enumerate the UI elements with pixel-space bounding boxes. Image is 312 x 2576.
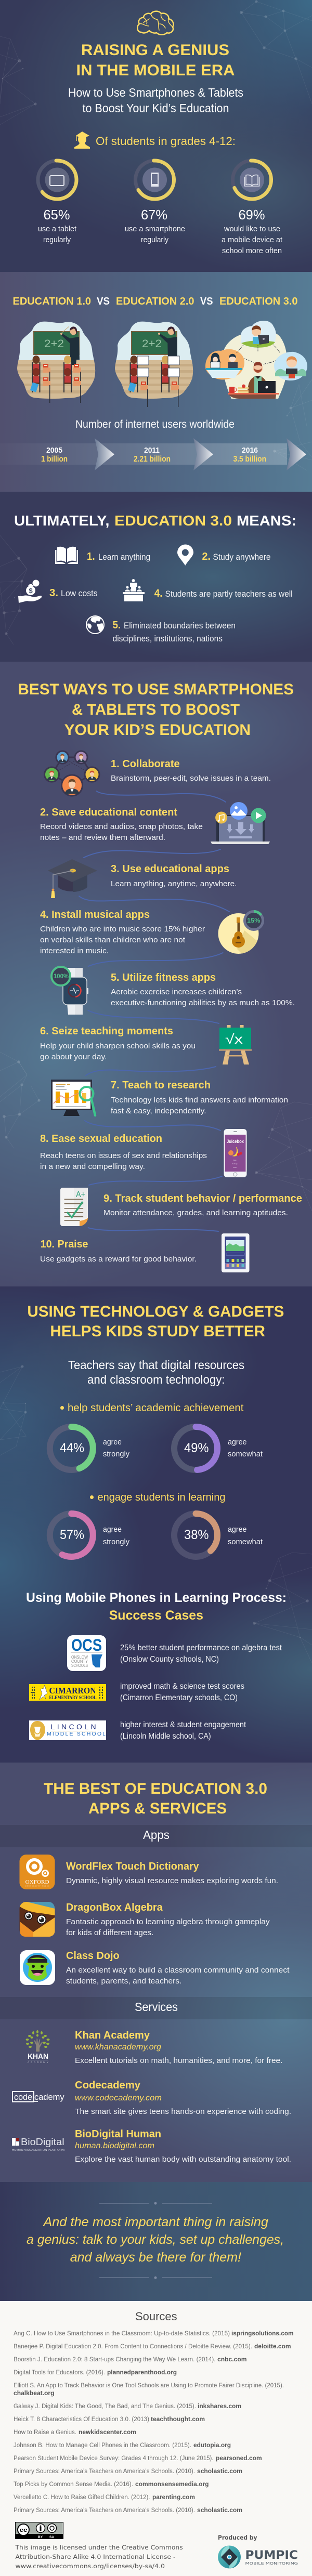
service: khan academy: Khan Academy bbox=[75, 2030, 150, 2041]
app: dragonbox: Fantastic approach to learning algebra through gameplay bbox=[66, 1917, 270, 1926]
sources list: teachthought.com bbox=[151, 2416, 205, 2423]
logo: biodigital: HUMAN VISUALIZATION PLATFORM bbox=[12, 2149, 64, 2152]
icon: phone with juicebox app: Settings bbox=[232, 1163, 238, 1165]
list item 2: study anywhere bbox=[202, 551, 270, 562]
heading: number of internet users: Number of internet users worldwide bbox=[75, 418, 235, 430]
icon: podium bbox=[123, 579, 145, 601]
icon: graduate bbox=[74, 132, 90, 149]
app: wordflex: WordFlex Touch Dictionary bbox=[66, 1861, 200, 1872]
sources list: scholastic.com bbox=[197, 2468, 242, 2475]
connector curves bbox=[79, 791, 229, 1231]
logo: onslow county schools: SCHOOLS bbox=[71, 1663, 88, 1668]
heading: education versions bbox=[12, 295, 297, 307]
heading: education versions: VS bbox=[200, 295, 213, 307]
list item 4: students are teachers: Students are partly teachers as well bbox=[165, 589, 293, 599]
app: class dojo: Class Dojo bbox=[66, 1950, 120, 1962]
sources list: scholastic.com bbox=[197, 2507, 242, 2514]
stat: tablet 65% bbox=[37, 160, 77, 244]
icon: tablet bbox=[222, 1233, 250, 1272]
item 9: track student behavior bbox=[103, 1193, 302, 1217]
donut: 38% agree somewhat: 38% bbox=[184, 1528, 209, 1542]
item 2: save educational content: Record videos and audios, snap photos, take bbox=[40, 822, 203, 831]
app: class dojo: An excellent way to build a classroom community and connect bbox=[66, 1966, 290, 1975]
icon: hand with coins: $ bbox=[29, 587, 33, 595]
icon: phone with juicebox app: Juicebox bbox=[227, 1139, 244, 1144]
bullet heading: engage students: engage students in learning bbox=[98, 1492, 226, 1503]
sources list: inkshares.com bbox=[198, 2403, 241, 2410]
timeline: internet users bbox=[0, 438, 306, 470]
icon: chalkboard bbox=[219, 1025, 252, 1064]
service: biodigital human: Explore the vast human body with outstanding anatomy tool. bbox=[75, 2155, 291, 2164]
badge: creative commons by-sa bbox=[15, 2522, 63, 2539]
item 10: praise: Use gadgets as a reward for good behavior. bbox=[40, 1255, 197, 1264]
sources list: ispringsolutions.com bbox=[231, 2331, 293, 2337]
heading: best ways: YOUR KID’S EDUCATION bbox=[64, 721, 251, 739]
item 2: save educational content: notes – and review them afterward. bbox=[40, 833, 165, 842]
app: wordflex: Dynamic, highly visual resource makes exploring words fun. bbox=[66, 1876, 278, 1885]
heading: using technology: USING TECHNOLOGY & GADGETS bbox=[27, 1303, 284, 1320]
logo: onslow county schools: OCS bbox=[71, 1636, 102, 1654]
donut: 38% agree somewhat: agree bbox=[228, 1525, 246, 1534]
logo: pumpic bbox=[218, 2546, 298, 2569]
subtitle: to Boost Your Kid’s Education bbox=[82, 101, 229, 115]
item 7: teach to research: 7. Teach to research bbox=[111, 1080, 211, 1091]
list item 3: low costs: Low costs bbox=[61, 588, 98, 598]
stat: smartphone 67%: 67% bbox=[141, 207, 167, 222]
section background: best ways bbox=[0, 662, 312, 1289]
logo: khan academy bbox=[26, 2030, 50, 2064]
title: RAISING A GENIUS bbox=[81, 42, 229, 59]
heading: best of education 3.0: THE BEST OF EDUCATION 3.0 bbox=[44, 1780, 267, 1797]
item 6: seize teaching moments: go about your day. bbox=[40, 1053, 107, 1061]
item 8: ease sexual education bbox=[40, 1133, 207, 1171]
icon: chalkboard: √x bbox=[225, 1031, 243, 1047]
list item 3: low costs bbox=[49, 587, 98, 599]
quote top divider bbox=[99, 2202, 212, 2205]
heading: best ways: & TABLETS TO BOOST bbox=[72, 701, 240, 718]
item 5: fitness apps bbox=[111, 972, 295, 1007]
sources list: parenting.com bbox=[152, 2494, 195, 2501]
list item 1: learn anything: 1. bbox=[87, 551, 95, 562]
donut: 57% agree strongly bbox=[50, 1514, 129, 1557]
donut: 57% agree strongly: agree bbox=[103, 1525, 122, 1534]
app icon: wordflex: UNIVERSITY PRESS bbox=[25, 1885, 49, 1887]
illustration: education 1.0 classroom: 2+2 bbox=[44, 338, 64, 350]
icon: graded document: A+ bbox=[76, 1190, 85, 1199]
service: codecademy: www.codecademy.com bbox=[75, 2094, 162, 2102]
icon: graduation cap bbox=[48, 859, 97, 898]
heading: best ways: BEST WAYS TO USE SMARTPHONES bbox=[18, 681, 294, 698]
timeline: internet users: 2011 bbox=[144, 446, 160, 455]
logo: onslow county schools bbox=[67, 1635, 106, 1671]
app: dragonbox bbox=[66, 1902, 270, 1937]
title: IN THE MOBILE ERA bbox=[76, 62, 235, 79]
app: dragonbox: DragonBox Algebra bbox=[66, 1902, 163, 1913]
section background: apps and services bbox=[0, 1763, 312, 2183]
icon: collaboration network bbox=[45, 751, 99, 796]
item 1: collaborate bbox=[111, 758, 271, 783]
sources list: newkidscenter.com bbox=[79, 2429, 136, 2436]
heading: education versions: EDUCATION 2.0 bbox=[116, 295, 194, 307]
heading: success cases: Success Cases bbox=[109, 1608, 203, 1623]
license text: This image is licensed under the Creative Commons bbox=[15, 2544, 183, 2551]
intro text: teachers say: and classroom technology: bbox=[87, 1373, 225, 1386]
title bbox=[76, 42, 235, 79]
sources list: Heick T. 8 Characteristics Of Education 3.0. (2013) bbox=[14, 2416, 149, 2423]
item 10: praise bbox=[40, 1239, 197, 1264]
timeline: internet users: 2005 bbox=[46, 446, 62, 455]
sources list: How to Raise a Genius. bbox=[14, 2429, 76, 2436]
illustration: education 3.0 connected learning bbox=[205, 321, 307, 399]
service: biodigital human bbox=[75, 2128, 291, 2164]
logo: biodigital: BioDigital bbox=[21, 2137, 64, 2147]
item 6: seize teaching moments bbox=[40, 1026, 196, 1061]
donut: 49% agree somewhat: somewhat bbox=[228, 1450, 263, 1458]
badge: creative commons by-sa: SA bbox=[49, 2535, 54, 2539]
donut: 38% agree somewhat: somewhat bbox=[228, 1537, 263, 1546]
heading: best of education 3.0 bbox=[44, 1780, 267, 1817]
case: onslow: (Onslow County schools, NC) bbox=[120, 1655, 219, 1664]
app icon: class dojo bbox=[20, 1950, 55, 1985]
service: codecademy bbox=[75, 2080, 291, 2116]
icon: phone with juicebox app bbox=[224, 1129, 246, 1177]
app icon: wordflex: OXFORD bbox=[25, 1880, 49, 1885]
illustration: education 1.0 classroom bbox=[16, 320, 97, 403]
stat: mobile at school 69%: 69% bbox=[238, 207, 265, 222]
app: dragonbox: for kids of different ages. bbox=[66, 1928, 153, 1937]
case: lincoln: higher interest & student engagement bbox=[120, 1720, 246, 1729]
section background: education 3.0 means bbox=[0, 492, 312, 662]
item 7: teach to research: fast & easy, independently. bbox=[111, 1107, 206, 1115]
stat: mobile at school 69%: would like to use bbox=[224, 225, 280, 233]
service: codecademy: The smart site gives teens hands-on experience with coding. bbox=[75, 2107, 291, 2116]
item 4: install musical apps bbox=[40, 909, 205, 955]
heading: ultimately education 3.0 means: EDUCATION 3.0 bbox=[114, 512, 232, 529]
closing quote: a genius: talk to your kids, set up challenges, bbox=[27, 2232, 284, 2247]
heading: ultimately education 3.0 means: MEANS: bbox=[237, 512, 296, 529]
timeline: internet users: 2.21 billion bbox=[134, 455, 171, 464]
list item 5: eliminated boundaries: 5. bbox=[113, 620, 121, 631]
sources list: Primary Sources: America’s Teachers on America’s Schools. (2010). bbox=[14, 2468, 195, 2475]
closing quote: And the most important thing in raising bbox=[42, 2215, 268, 2229]
item 4: install musical apps: interested in music. bbox=[40, 947, 109, 955]
item 5: fitness apps: 5. Utilize fitness apps bbox=[111, 972, 216, 983]
stat: mobile at school 69%: a mobile device at bbox=[222, 235, 283, 244]
sources list: Elliott S. An App to Track Behavior is One Tool Schools are Using to Promote Fairer Discipline. (2015). bbox=[14, 2383, 284, 2389]
logo: khan academy: ACADEMY bbox=[28, 2061, 48, 2064]
sources list: Galway J. Digital Kids: The Good, The Bad, and The Genius. (2015). bbox=[14, 2403, 196, 2410]
donut: 49% agree somewhat bbox=[174, 1427, 263, 1470]
donut: 44% agree strongly bbox=[50, 1427, 129, 1470]
heading: best ways bbox=[18, 681, 294, 739]
logo: khan academy: KHAN bbox=[28, 2052, 48, 2061]
license text bbox=[15, 2544, 183, 2570]
sources list: Johnson B. How to Manage Cell Phones in the Classroom. (2015). bbox=[14, 2442, 191, 2449]
icon: brain bbox=[137, 11, 174, 35]
heading: using technology bbox=[27, 1303, 284, 1340]
sources list: pearsoned.com bbox=[216, 2455, 262, 2462]
icon: phone with juicebox app: More bbox=[233, 1166, 237, 1168]
network decoration bbox=[0, 0, 312, 1663]
item 8: ease sexual education: in a new and compelling way. bbox=[40, 1162, 145, 1171]
timeline: internet users: 3.5 billion bbox=[233, 455, 266, 464]
intro text: teachers say: Teachers say that digital resources bbox=[68, 1358, 244, 1372]
app icon: wordflex bbox=[20, 1855, 55, 1889]
quote bottom divider bbox=[99, 2277, 212, 2279]
logo: codecademy: code bbox=[14, 2092, 32, 2102]
stat: smartphone 67% bbox=[125, 160, 185, 244]
badge: creative commons by-sa: cc bbox=[20, 2527, 27, 2533]
heading: success cases bbox=[26, 1591, 287, 1623]
logo: cimarron elementary bbox=[29, 1684, 106, 1701]
heading: best of education 3.0: APPS & SERVICES bbox=[88, 1800, 227, 1817]
item 2: save educational content: 2. Save educational content bbox=[40, 807, 177, 818]
case: lincoln bbox=[120, 1720, 246, 1741]
logo: lincoln middle school: MIDDLE SCHOOL bbox=[47, 1731, 106, 1737]
service: biodigital human: BioDigital Human bbox=[75, 2128, 161, 2140]
logo: biodigital bbox=[12, 2137, 64, 2152]
sources list: plannedparenthood.org bbox=[107, 2370, 177, 2376]
heading: education versions: EDUCATION 3.0 bbox=[219, 295, 297, 307]
item 9: track student behavior: Monitor attendance, grades, and learning aptitudes. bbox=[103, 1208, 288, 1217]
sources list: chalkbeat.org bbox=[14, 2390, 54, 2397]
subtitle: How to Use Smartphones & Tablets bbox=[68, 86, 243, 99]
item 9: track student behavior: 9. Track student behavior / performance bbox=[103, 1193, 302, 1204]
item 3: use educational apps: 3. Use educational apps bbox=[111, 863, 229, 875]
icon: location pin bbox=[177, 545, 193, 566]
item 2: save educational content bbox=[40, 807, 203, 842]
service: khan academy bbox=[75, 2030, 282, 2065]
sources list: Pearson Student Mobile Device Survey: Grades 4 through 12. (June 2015). bbox=[14, 2455, 214, 2462]
item 5: fitness apps: executive-functioning abilities by as much as 100%. bbox=[111, 998, 295, 1007]
band: apps bbox=[0, 1825, 312, 1847]
sources list: Ang C. How to Use Smartphones in the Classroom: Up-to-date Statistics. (2015) bbox=[14, 2331, 230, 2337]
list item 5: eliminated boundaries bbox=[113, 620, 236, 643]
heading: success cases: Using Mobile Phones in Learning Process: bbox=[26, 1591, 287, 1605]
case: lincoln: (Lincoln Middle school, CA) bbox=[120, 1732, 211, 1741]
donut: 57% agree strongly: 57% bbox=[60, 1528, 84, 1542]
item 8: ease sexual education: 8. Ease sexual education bbox=[40, 1133, 162, 1145]
icon: open book bbox=[55, 547, 78, 564]
icon: smartwatch with 100% badge: 100% bbox=[54, 974, 69, 980]
stat: tablet 65%: regularly bbox=[43, 235, 71, 244]
stat: tablet 65%: use a tablet bbox=[38, 225, 77, 233]
illustration: education 2.0 classroom: 2+2 bbox=[142, 338, 162, 350]
heading: sources: Sources bbox=[135, 2310, 177, 2323]
icon: smartwatch with 100% badge bbox=[51, 967, 88, 1015]
heading: ultimately education 3.0 means bbox=[14, 512, 296, 529]
icon: monitor with chart bbox=[51, 1080, 95, 1116]
illustration: education 2.0 classroom bbox=[113, 320, 194, 407]
donut: 44% agree strongly: agree bbox=[103, 1438, 122, 1447]
case: cimarron: (Cimarron Elementary schools, CO) bbox=[120, 1693, 238, 1702]
bullet heading: academic achievement: help students’ academic achievement bbox=[68, 1402, 244, 1414]
section background: intro bbox=[0, 0, 312, 272]
item 4: install musical apps: Children who are into music score 15% higher bbox=[40, 925, 205, 934]
donut: 49% agree somewhat: agree bbox=[228, 1438, 246, 1447]
intro text: teachers say bbox=[68, 1358, 244, 1386]
logo: pumpic: MOBILE MONITORING bbox=[245, 2561, 298, 2566]
heading: ultimately education 3.0 means: ULTIMATELY, bbox=[14, 512, 109, 529]
logo: onslow county schools: COUNTY bbox=[71, 1659, 88, 1664]
case: cimarron: improved math & science test scores bbox=[120, 1682, 244, 1691]
logo: cimarron elementary: ELEMENTARY SCHOOL bbox=[49, 1695, 97, 1700]
logo: codecademy bbox=[12, 2092, 64, 2102]
stat: tablet 65%: 65% bbox=[44, 207, 70, 222]
badge: creative commons by-sa: BY bbox=[38, 2535, 43, 2539]
heading: of students: Of students in grades 4-12: bbox=[96, 135, 236, 148]
heading: using technology: HELPS KIDS STUDY BETTER bbox=[50, 1323, 265, 1340]
item 6: seize teaching moments: 6. Seize teaching moments bbox=[40, 1026, 173, 1037]
item 3: use educational apps bbox=[111, 863, 237, 888]
item 8: ease sexual education: Reach teens on issues of sex and relationships bbox=[40, 1151, 207, 1160]
item 1: collaborate: Brainstorm, peer-edit, solve issues in a team. bbox=[111, 774, 271, 783]
list item 2: study anywhere: 2. bbox=[202, 551, 211, 562]
item 4: install musical apps: 4. Install musical apps bbox=[40, 909, 150, 921]
stat: mobile at school 69%: school more often bbox=[222, 246, 282, 255]
heading: education versions: VS bbox=[97, 295, 110, 307]
donut: 44% agree strongly: strongly bbox=[103, 1450, 129, 1458]
item 5: fitness apps: Aerobic exercise increases children’s bbox=[111, 988, 242, 996]
app: wordflex bbox=[66, 1861, 278, 1885]
donut: 49% agree somewhat: 49% bbox=[184, 1441, 209, 1455]
sources list: cnbc.com bbox=[217, 2357, 246, 2363]
sources list: Primary Sources: America’s Teachers on America’s Schools. (2010). bbox=[14, 2507, 195, 2514]
band: services bbox=[0, 1997, 312, 2019]
app: class dojo bbox=[66, 1950, 290, 1986]
service: codecademy: Codecademy bbox=[75, 2080, 141, 2091]
sources list: Top Picks by Common Sense Media. (2016). bbox=[14, 2481, 133, 2488]
section background: sources bbox=[0, 2301, 312, 2576]
icon: hand with coins bbox=[18, 580, 42, 603]
sources list: Digital Tools for Educators. (2016). bbox=[14, 2370, 105, 2376]
band: services: Services bbox=[135, 2000, 178, 2014]
logo: codecademy: cademy bbox=[34, 2092, 64, 2102]
logo: pumpic: PUMPIC bbox=[245, 2549, 298, 2562]
sources list: Vercelletto C. How to Raise Gifted Children. (2012). bbox=[14, 2494, 150, 2501]
timeline: internet users: 2016 bbox=[242, 446, 258, 455]
donut: 38% agree somewhat bbox=[174, 1514, 263, 1557]
sources list: commonsensemedia.org bbox=[135, 2481, 209, 2488]
icon: graded document bbox=[60, 1188, 88, 1226]
closing quote bbox=[27, 2215, 284, 2265]
section background: education comparison bbox=[0, 272, 312, 492]
closing quote: and always be there for them! bbox=[70, 2250, 241, 2265]
section background: technology helps bbox=[0, 1286, 312, 1763]
section background: closing quote bbox=[0, 2182, 312, 2301]
logo: cimarron elementary: CIMARRON bbox=[49, 1686, 96, 1696]
list item 3: low costs: 3. bbox=[49, 587, 58, 599]
list item 5: eliminated boundaries: Eliminated boundaries between bbox=[124, 621, 236, 630]
logo: lincoln middle school: LINCOLN bbox=[51, 1723, 96, 1731]
sources list bbox=[14, 2331, 293, 2514]
case: cimarron bbox=[120, 1682, 244, 1702]
sources list: edutopia.org bbox=[193, 2442, 231, 2449]
list item 1: learn anything: Learn anything bbox=[98, 552, 150, 562]
item 7: teach to research: Technology lets kids find answers and information bbox=[111, 1096, 288, 1105]
list item 5: eliminated boundaries: disciplines, institutions, nations bbox=[113, 634, 223, 643]
item 10: praise: 10. Praise bbox=[41, 1239, 88, 1250]
logo: onslow county schools: ONSLOW bbox=[71, 1654, 88, 1660]
license text: Attribution-Share Alike 4.0 International License - bbox=[16, 2553, 176, 2560]
icon: phone with juicebox app: Start bbox=[233, 1159, 237, 1161]
sources list: Boorstin J. Education 2.0: 8 Start-ups Changing the Way We Learn. (2014). bbox=[14, 2357, 215, 2363]
item 3: use educational apps: Learn anything, anytime, anywhere. bbox=[111, 879, 237, 888]
band: apps: Apps bbox=[143, 1828, 170, 1842]
case: onslow bbox=[120, 1644, 282, 1664]
heading: education versions: EDUCATION 1.0 bbox=[12, 295, 91, 307]
case: onslow: 25% better student performance on algebra test bbox=[120, 1644, 282, 1652]
donut: 57% agree strongly: strongly bbox=[103, 1537, 129, 1546]
license text: www.creativecommons.org/licenses/by-sa/4.0 bbox=[16, 2562, 165, 2570]
icon: laptop with media bbox=[211, 802, 270, 844]
stat: smartphone 67%: regularly bbox=[141, 235, 168, 244]
sources list: Banerjee P. Digital Education 2.0. From Content to Connections / Deloitte Review. (2015). bbox=[14, 2344, 252, 2350]
icon: guitar with 15% badge: 15% bbox=[247, 917, 261, 924]
timeline: internet users: 1 billion bbox=[41, 455, 68, 464]
stat: mobile at school 69% bbox=[222, 160, 283, 255]
item 7: teach to research bbox=[111, 1080, 288, 1115]
list item 4: students are teachers: 4. bbox=[154, 588, 163, 599]
icon: globe bbox=[86, 616, 104, 634]
list item 1: learn anything bbox=[87, 551, 150, 562]
list item 2: study anywhere: Study anywhere bbox=[213, 552, 270, 562]
logo: lincoln middle school bbox=[29, 1720, 106, 1740]
produced by label: Produced by bbox=[218, 2534, 257, 2541]
sources list: deloitte.com bbox=[254, 2344, 291, 2350]
item 6: seize teaching moments: Help your child sharpen school skills as you bbox=[40, 1042, 196, 1050]
service: biodigital human: human.biodigital.com bbox=[75, 2141, 154, 2150]
app: class dojo: students, parents, and teachers. bbox=[66, 1977, 181, 1986]
icon: guitar with 15% badge bbox=[218, 912, 263, 956]
item 1: collaborate: 1. Collaborate bbox=[111, 758, 180, 770]
app icon: dragonbox bbox=[20, 1902, 55, 1937]
donut: 44% agree strongly: 44% bbox=[60, 1441, 84, 1455]
item 4: install musical apps: on verbal skills than children who are not bbox=[40, 936, 186, 944]
subtitle bbox=[68, 86, 243, 115]
service: khan academy: www.khanacademy.org bbox=[75, 2043, 161, 2052]
service: khan academy: Excellent tutorials on math, humanities, and more, for free. bbox=[75, 2056, 282, 2065]
stat: smartphone 67%: use a smartphone bbox=[125, 225, 185, 233]
